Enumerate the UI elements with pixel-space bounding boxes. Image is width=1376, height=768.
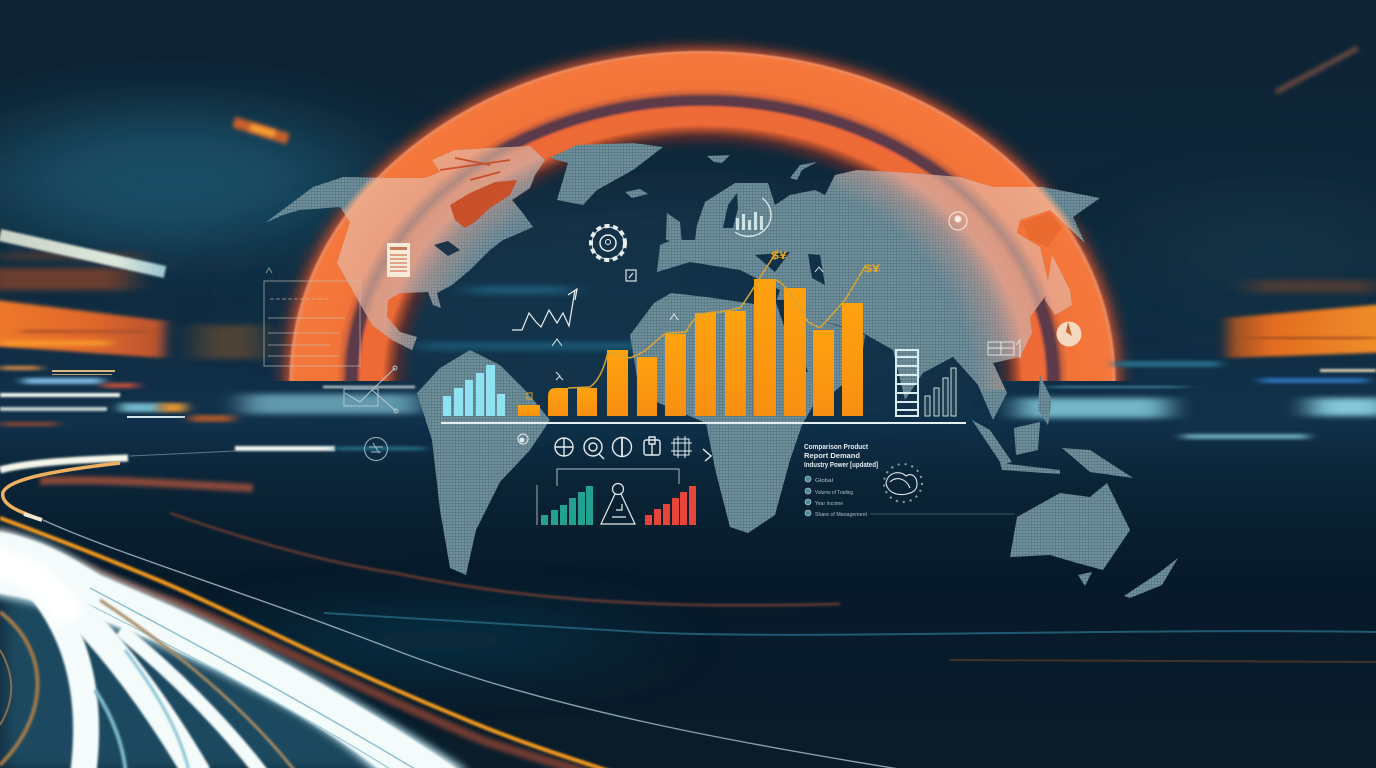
globe chart icon, Europe	[735, 198, 771, 236]
text block: heading: Comparison Product	[804, 442, 868, 451]
legend list	[805, 476, 1015, 518]
icon: pie disc	[1056, 322, 1082, 346]
icon: linked loops in dashed ring	[884, 464, 922, 502]
line chart: scattered, left	[344, 366, 398, 413]
Southeast Asia islands	[972, 375, 1133, 478]
seas and bays cut in map	[434, 158, 1062, 417]
Arctic channels	[440, 158, 510, 180]
legend item 3	[805, 499, 843, 507]
text block: heading	[804, 442, 878, 469]
icon: small grid	[988, 340, 1020, 358]
chart axis	[441, 422, 966, 424]
Japan	[1045, 255, 1072, 315]
motion streaks: left	[0, 122, 425, 456]
red bar chart	[645, 486, 696, 525]
icon: small square	[626, 270, 636, 281]
icon: crosshair	[555, 438, 573, 456]
Mediterranean	[680, 264, 770, 292]
white tower chart	[896, 350, 918, 416]
Svalbard	[707, 155, 730, 163]
legend item 2	[805, 488, 853, 496]
legend item 1	[805, 476, 833, 484]
Tasmania and New Zealand	[1078, 558, 1178, 598]
Eurasia	[657, 170, 1100, 420]
Baltic	[723, 193, 738, 228]
Red Sea	[775, 300, 808, 372]
icon: network circle, left	[364, 438, 388, 460]
legend item 4: Share of Management	[815, 512, 867, 518]
icon: clock	[612, 438, 632, 456]
North America	[265, 146, 545, 350]
Hudson Bay	[450, 180, 517, 228]
icon: circuit	[671, 436, 692, 458]
icon: small dial	[518, 434, 528, 444]
icon: document	[387, 243, 410, 277]
teal bar chart	[537, 485, 593, 525]
Australia	[1010, 483, 1130, 570]
Africa	[630, 293, 830, 533]
bracket above bottom charts	[557, 469, 679, 486]
motion streaks: right	[1018, 48, 1376, 439]
text block: heading: Industry Power [updated]	[804, 460, 878, 469]
line chart: rising arrow	[512, 289, 577, 330]
Iceland	[625, 189, 648, 198]
Novaya Zemlya	[790, 162, 817, 180]
outlined bar chart, right	[925, 368, 956, 416]
Black and Caspian seas	[755, 252, 825, 285]
legend item 1: Global	[815, 478, 833, 484]
streaks behind Atlantic	[420, 286, 650, 350]
light trails: lower left	[0, 458, 1376, 768]
South America	[417, 350, 550, 575]
icon: chevron	[703, 449, 711, 461]
icon: clipboard	[644, 437, 660, 455]
orange arc with glow and double band	[260, 30, 1150, 390]
icon row	[518, 434, 711, 461]
icon: search	[584, 438, 604, 459]
Bay of Bengal	[905, 357, 978, 417]
Greenland	[550, 143, 663, 205]
chart peak labels	[771, 250, 881, 275]
icon: circle pin	[949, 212, 967, 230]
icon: gear	[591, 226, 625, 260]
data table panel, left	[264, 268, 360, 366]
legend item 4	[805, 510, 867, 518]
legend item 2: Volume of Trading	[815, 490, 853, 496]
chart peak labels: $¥	[864, 263, 881, 275]
Great Lakes	[434, 241, 460, 256]
main orange bar chart	[518, 279, 863, 416]
text block: heading: Report Demand	[804, 451, 860, 460]
icon: warning triangle	[601, 484, 635, 524]
UK	[666, 213, 682, 243]
Sea of Okhotsk	[1022, 212, 1062, 247]
Arabia	[770, 290, 865, 395]
peach tint of arc over land	[337, 146, 1084, 390]
world map	[265, 143, 1178, 598]
chart peak labels: $¥	[771, 250, 788, 262]
trend line over orange bars	[568, 250, 866, 388]
legend item 3: Year Income	[815, 501, 843, 507]
cyan bar chart	[443, 365, 505, 416]
small markers above bars	[527, 267, 823, 399]
